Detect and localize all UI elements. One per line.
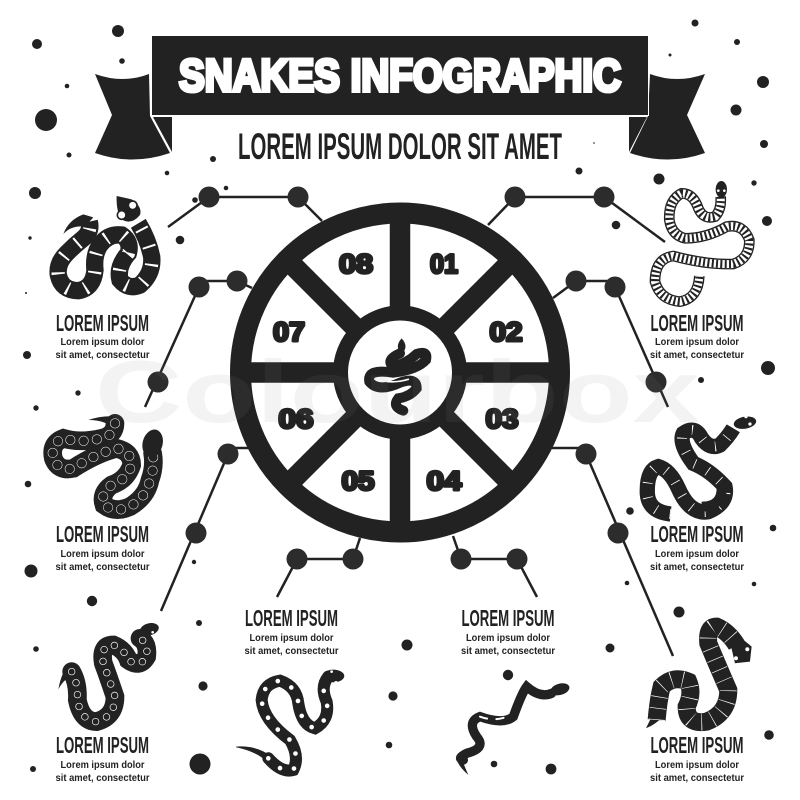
ribbon left fold: [153, 117, 172, 152]
icon: snake top right: [655, 181, 749, 302]
label bottom right: Lorem ipsum dolor: [655, 759, 739, 771]
label right middle: sit amet, consectetur: [650, 561, 744, 573]
wheel spokes: [250, 222, 550, 523]
wheel hub: [340, 313, 460, 432]
label bottom right: sit amet, consectetur: [650, 772, 744, 784]
title: SNAKES INFOGRAPHIC: [179, 50, 621, 101]
icon: snake bottom right: [646, 627, 752, 728]
segment numbers: 07: [273, 317, 305, 347]
segment numbers: 04: [426, 466, 462, 496]
segment numbers: [273, 249, 522, 496]
label left middle: [56, 521, 150, 573]
label bottom right: [650, 732, 744, 784]
icon: snake bottom left: [58, 621, 160, 722]
icon: snake right middle: [647, 415, 757, 514]
watermark: Colourbox: [95, 342, 700, 441]
icon: snake left middle: [53, 416, 166, 510]
connector 04: [450, 536, 537, 597]
icon: snake bottom middle left: [236, 670, 344, 771]
icon: centre snake: [369, 338, 426, 411]
label right middle: [650, 521, 744, 573]
ribbon right tail: [630, 74, 705, 160]
label bottom centre right: sit amet, consectetur: [461, 645, 555, 657]
label bottom left: [56, 732, 150, 784]
label bottom centre left: [244, 605, 338, 657]
label right middle: Lorem ipsum dolor: [655, 548, 739, 560]
label left middle: LOREM IPSUM: [56, 521, 149, 547]
label bottom centre right: LOREM IPSUM: [462, 605, 554, 631]
ribbon left tail: [95, 74, 170, 160]
label top right: Lorem ipsum dolor: [655, 336, 739, 348]
label bottom centre left: LOREM IPSUM: [245, 605, 338, 631]
wheel outer ring: [240, 213, 560, 532]
ribbon main band: [152, 36, 648, 116]
label top left: [56, 310, 150, 361]
icon: snake bottom middle right: [456, 681, 571, 775]
label bottom centre right: [461, 605, 555, 657]
segment numbers: 02: [490, 317, 522, 347]
label bottom left: Lorem ipsum dolor: [60, 759, 144, 771]
label top left: LOREM IPSUM: [56, 310, 149, 336]
central wheel: [240, 212, 560, 532]
label top right: sit amet, consectetur: [650, 349, 744, 361]
connector 03: [552, 444, 673, 656]
label top right: [650, 310, 744, 361]
label top left: sit amet, consectetur: [56, 349, 150, 361]
segment numbers: 03: [486, 404, 518, 434]
title ribbon banner: [95, 36, 705, 160]
label bottom centre left: Lorem ipsum dolor: [250, 632, 334, 644]
connector 06: [161, 444, 250, 611]
connector 02: [553, 270, 668, 407]
label left middle: sit amet, consectetur: [56, 561, 150, 573]
label top left: Lorem ipsum dolor: [60, 336, 144, 348]
label bottom left: LOREM IPSUM: [56, 732, 149, 758]
segment numbers: 05: [342, 466, 374, 496]
ribbon right fold: [629, 117, 647, 152]
icon: snake top left: [58, 196, 152, 291]
connector 05: [277, 538, 364, 597]
connector lines and nodes: [145, 186, 673, 656]
segment numbers: 06: [278, 404, 314, 434]
wheel face: [240, 212, 560, 532]
label bottom centre right: Lorem ipsum dolor: [466, 632, 550, 644]
connector 08: [168, 186, 322, 227]
segment numbers: 08: [339, 249, 373, 279]
connector 07: [145, 270, 252, 407]
label left middle: Lorem ipsum dolor: [60, 548, 144, 560]
label bottom centre left: sit amet, consectetur: [244, 645, 338, 657]
connector 01: [488, 186, 665, 242]
label bottom left: sit amet, consectetur: [56, 772, 150, 784]
segment numbers: 01: [430, 249, 458, 279]
